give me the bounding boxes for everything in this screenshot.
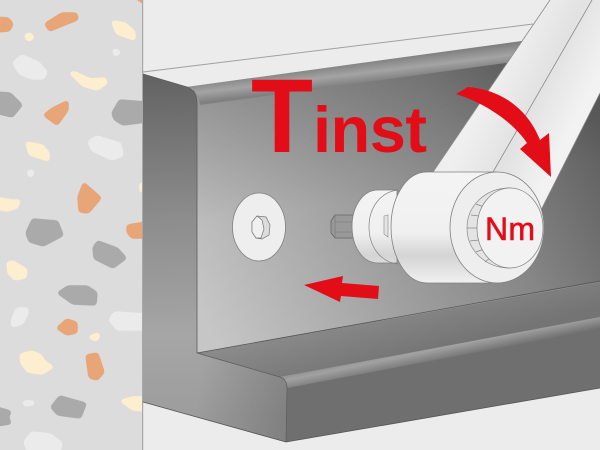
channel left end face xyxy=(143,74,287,442)
small socket xyxy=(352,190,398,264)
concrete wall with aggregate stones xyxy=(0,0,146,450)
label: T inst: inst xyxy=(313,93,427,166)
arrow: curved tightening direction xyxy=(456,87,551,177)
channel back face xyxy=(190,30,600,353)
wrench handle xyxy=(433,0,600,230)
channel lower flange top xyxy=(197,282,600,377)
Nm dial: Nm xyxy=(485,211,535,247)
socket face xyxy=(450,172,544,283)
wall line above channel xyxy=(143,24,533,72)
icon: torque wrench with socket xyxy=(331,0,600,283)
ratchet teeth ring xyxy=(467,188,510,268)
socket body xyxy=(391,172,497,283)
icon: screw head with hex socket xyxy=(232,193,286,261)
bit hex end xyxy=(331,215,354,238)
arrow: insertion direction xyxy=(304,276,379,302)
Nm dial xyxy=(477,188,543,268)
label: T inst: T xyxy=(251,58,313,175)
label: T inst xyxy=(251,58,427,175)
channel lower lip and front face xyxy=(280,317,600,442)
anchor channel profile xyxy=(143,24,600,442)
channel upper lip band xyxy=(186,32,600,105)
